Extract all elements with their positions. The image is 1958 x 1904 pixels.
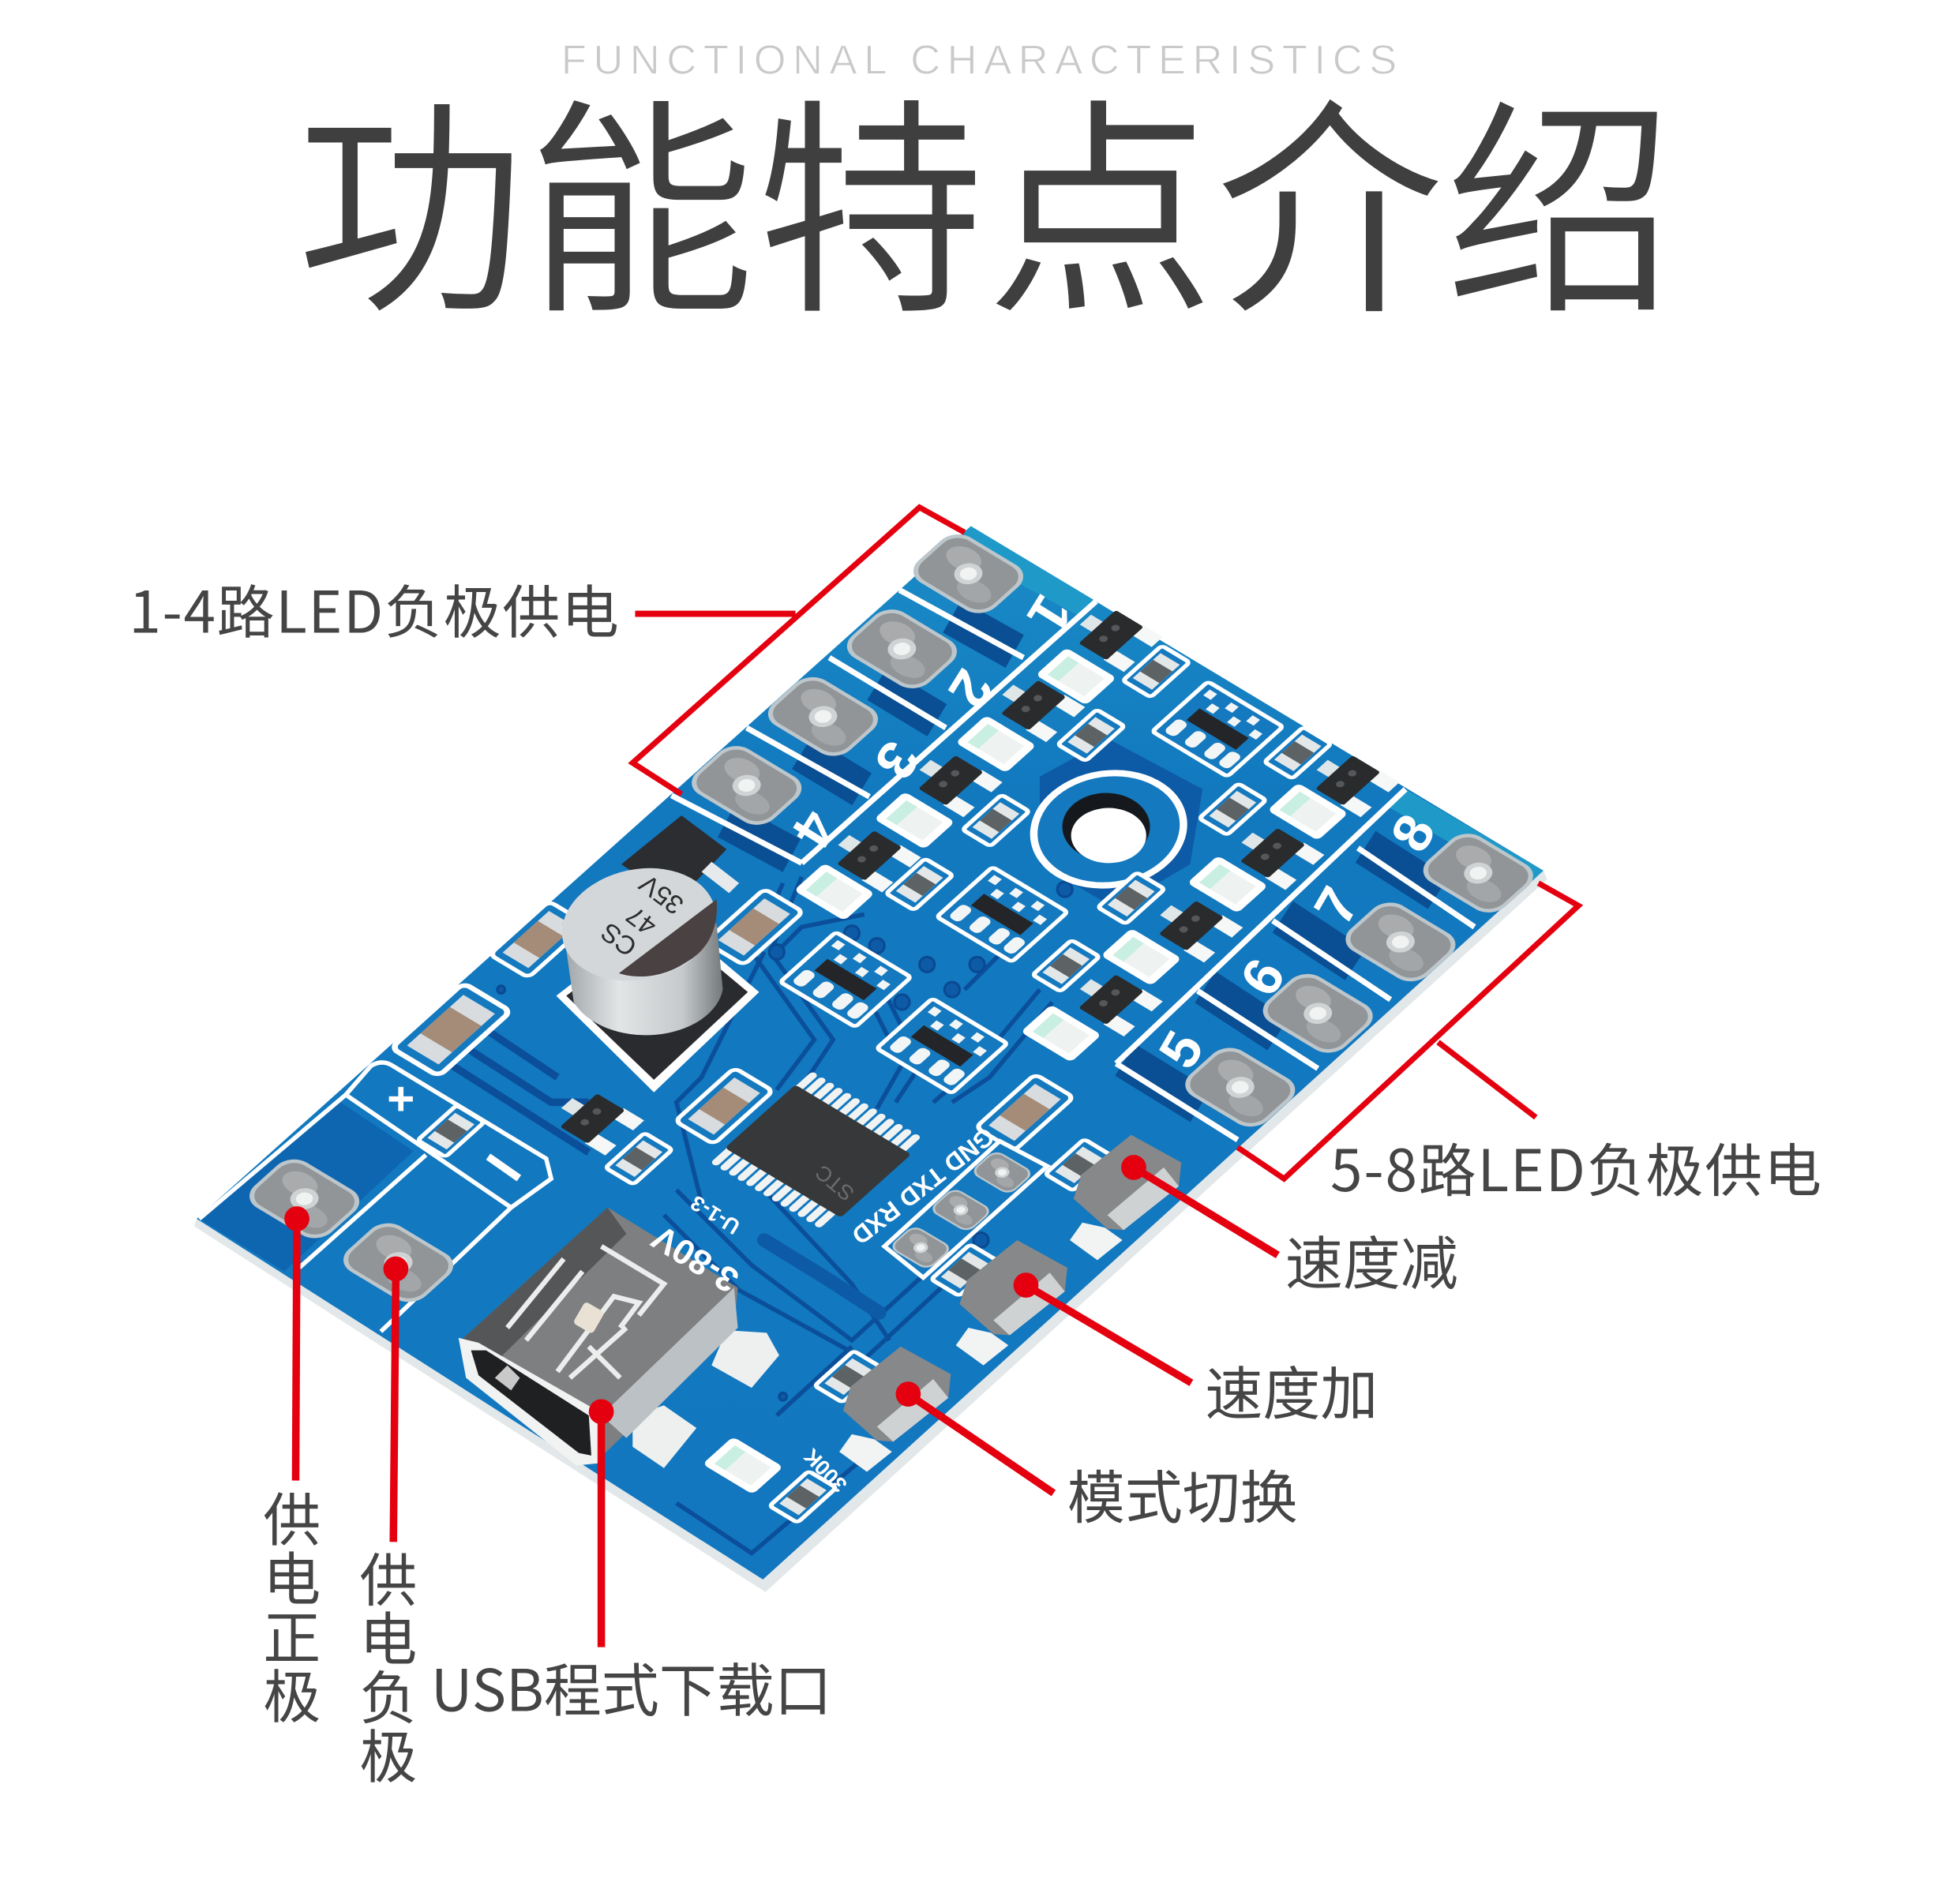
- leader: channels 5-8: [1438, 1042, 1536, 1117]
- numbers 1-4: 4: [780, 800, 849, 859]
- connector pins: [508, 1246, 664, 1377]
- arrow: speed up: [1014, 1272, 1191, 1383]
- round pads: [888, 1149, 1035, 1271]
- top edge highlight: [950, 527, 1544, 886]
- label: power negative: 极: [359, 1711, 417, 1795]
- numbers 5-8: 6: [1228, 948, 1297, 1006]
- mini USB connector: [459, 1208, 779, 1468]
- plus sign: +: [387, 1071, 414, 1125]
- silk labels: [645, 1190, 852, 1497]
- label: speed up: 速度加: [1205, 1347, 1378, 1431]
- dark stripes 1-4: [726, 617, 1015, 856]
- white silk outline: [199, 1063, 551, 1332]
- subtitle: FUNCTIONAL CHARACTERISTICS: [561, 38, 1397, 84]
- numbers 1-4: 1: [1015, 585, 1084, 643]
- label: channels 5-8: 5-8路LED负极供电: [1330, 1125, 1821, 1209]
- numbers 1-4: 2: [936, 660, 1005, 718]
- label: channels 1-4: 1-4路LED负极供电: [129, 566, 619, 650]
- numbers 1-4: [780, 585, 1084, 859]
- silk labels: U-1-3: [686, 1190, 745, 1239]
- board base: [197, 527, 1544, 1580]
- board edge shadow: [194, 871, 1547, 1592]
- silk box: [884, 1141, 1047, 1278]
- electrolytic capacitor: 47: [621, 900, 662, 941]
- power silk area: [199, 1063, 551, 1332]
- white dividers 1-4: [671, 590, 1096, 863]
- connector mouth: [459, 1338, 602, 1466]
- numbers 1-4: 3: [863, 731, 932, 789]
- SOT transistors: [547, 602, 1400, 1156]
- label: power positive: [263, 1475, 321, 1734]
- dark stripes 5-8: [1125, 847, 1438, 1106]
- black regulator: [621, 815, 739, 902]
- leader: channels 1-4: [635, 612, 796, 616]
- tab pads: [632, 1330, 779, 1468]
- dark power pad block: [199, 1102, 414, 1272]
- resistor networks: [780, 681, 1283, 1093]
- silk: channels 5-8: [1116, 789, 1542, 1140]
- resistors: [418, 646, 1331, 1523]
- numbers 5-8: 8: [1378, 804, 1447, 861]
- LED indicators: [705, 650, 1345, 1492]
- pads 1-4: [683, 528, 1032, 831]
- label: speed down: 速度减: [1285, 1217, 1458, 1301]
- silk text: GND TXD RXD: [846, 1122, 1000, 1250]
- connector shell: [461, 1208, 738, 1463]
- label: power negative: [359, 1535, 417, 1795]
- tactile button: mode: [815, 1347, 951, 1471]
- label: power positive: 供: [263, 1475, 321, 1558]
- label: power negative: 电: [359, 1593, 417, 1677]
- title: 功能特点介绍: [295, 26, 1675, 360]
- label: power positive: 极: [263, 1651, 321, 1734]
- header pads block: [846, 1122, 1047, 1278]
- label: power negative: 负: [359, 1652, 417, 1736]
- arrow: speed down: [1121, 1155, 1277, 1255]
- panel: circuit board: [194, 527, 1547, 1592]
- white dividers 5-8: [1116, 789, 1475, 1140]
- tactile button: speed up: [931, 1240, 1067, 1366]
- pads 5-8: [1176, 827, 1542, 1133]
- silk labels: 3-80V: [645, 1217, 745, 1300]
- main IC chip: [712, 1073, 925, 1229]
- label: mode switch: 模式切换: [1067, 1452, 1298, 1535]
- chip label: STC: [811, 1160, 859, 1205]
- label: power negative: 供: [359, 1535, 417, 1618]
- silk labels: 300K: [799, 1444, 852, 1497]
- label: USB download port: USB程式下载口: [431, 1645, 832, 1729]
- bracket: channels 1-4: [632, 508, 965, 794]
- vias: [497, 882, 1072, 1400]
- copper traces: [451, 739, 1202, 1554]
- ceramic capacitors: [392, 889, 1074, 1151]
- electrolytic capacitor: CS: [596, 916, 643, 961]
- numbers 5-8: [1147, 804, 1447, 1078]
- electrolytic capacitor: [551, 854, 760, 1093]
- bracket: channels 5-8: [1238, 883, 1578, 1179]
- power pads: [241, 1153, 462, 1308]
- arrow: USB port: [589, 1399, 613, 1647]
- mounting hole: [1022, 760, 1195, 898]
- arrow: mode switch: [895, 1381, 1053, 1493]
- label: power positive: 正: [263, 1592, 321, 1676]
- arrow: power positive: [284, 1206, 309, 1481]
- tactile button: speed down: [1045, 1135, 1181, 1260]
- callout brackets and leaders: [284, 508, 1578, 1647]
- label: power positive: 电: [263, 1533, 321, 1617]
- silk: channels 1-4: [671, 528, 1096, 863]
- minus sign: [486, 1153, 521, 1181]
- numbers 5-8: 5: [1147, 1021, 1216, 1078]
- numbers 5-8: 7: [1302, 877, 1371, 935]
- arrow: power negative: [384, 1257, 408, 1542]
- electrolytic capacitor: 35V: [634, 868, 689, 920]
